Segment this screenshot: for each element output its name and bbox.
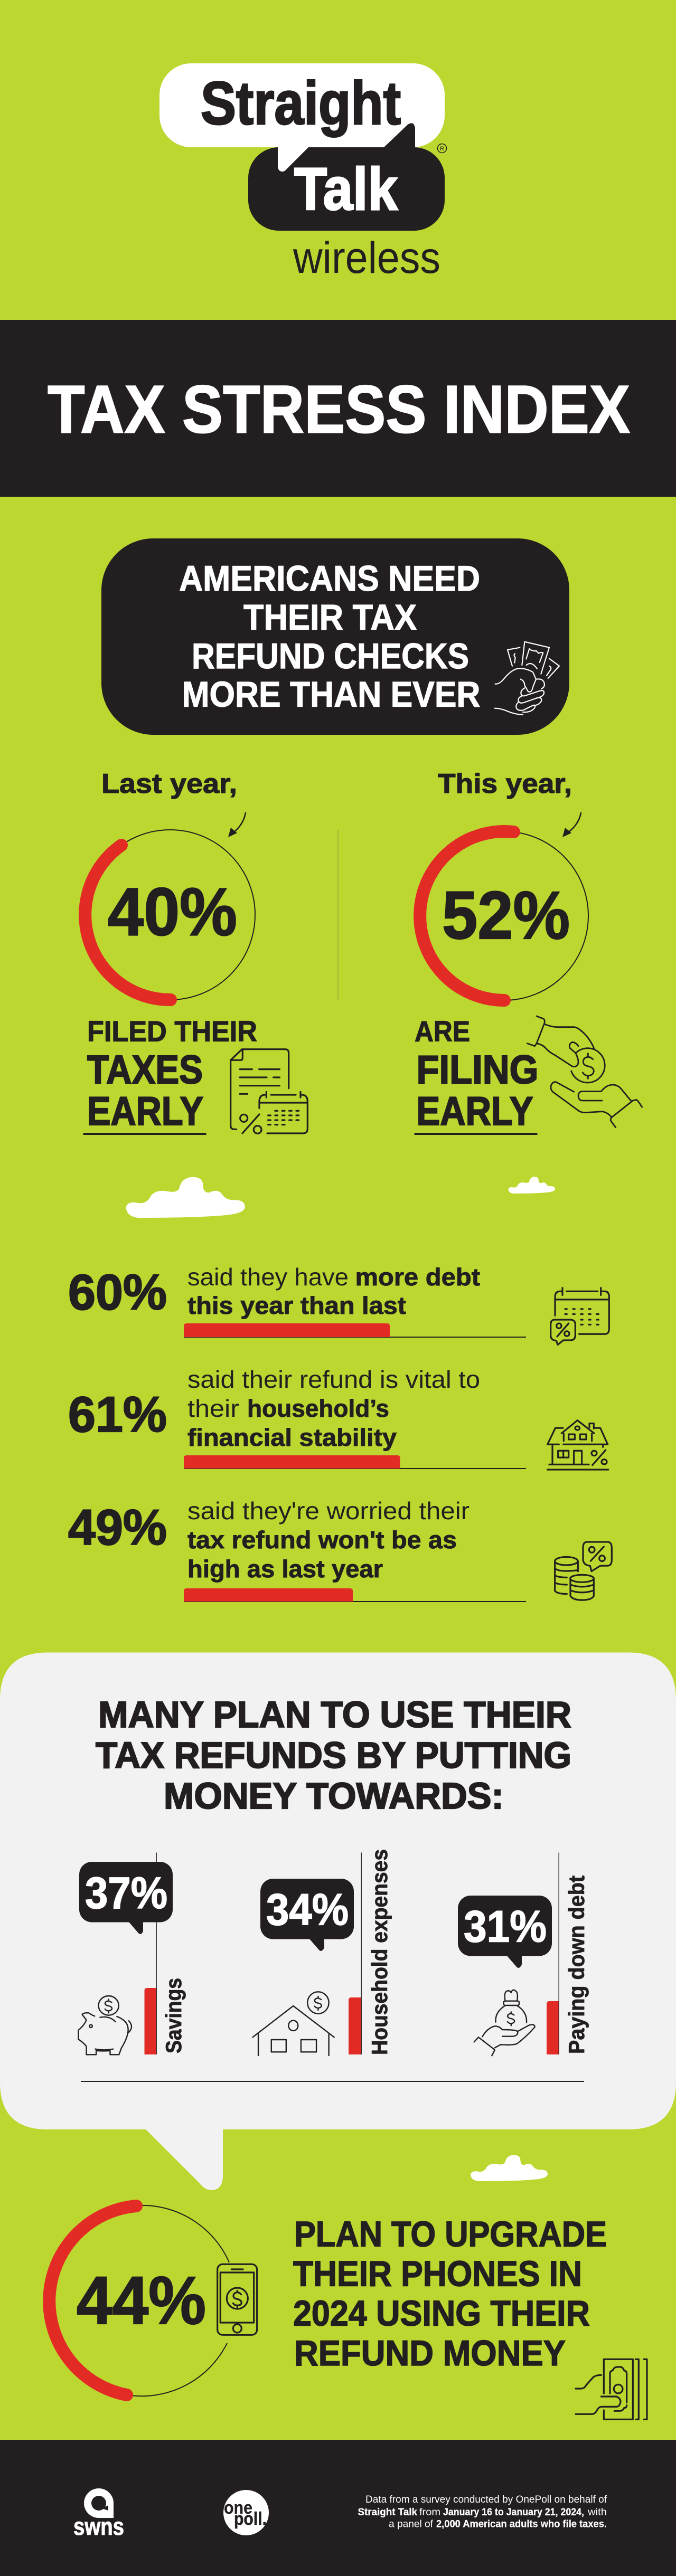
- icon: phone with dollar: [218, 2264, 257, 2335]
- logo: Straight Talk wireless: Straight: [201, 70, 401, 137]
- stat: 61% household stability: 61%: [68, 1387, 167, 1443]
- stat: 61% household stability: said their refund is vital to: [187, 1366, 480, 1393]
- stat: 49% worried about refund: [68, 1497, 612, 1602]
- text: survey source: Straight Talk: [358, 2507, 417, 2518]
- logo: Straight Talk wireless: Talk: [294, 156, 398, 222]
- icon: hands exchanging coin: [527, 1016, 642, 1128]
- donut chart: 40%: [85, 830, 255, 1000]
- logo: one poll: one: [224, 2498, 252, 2518]
- callout: 31%: [458, 1896, 552, 1968]
- callout: 31%: 31%: [464, 1901, 547, 1951]
- bar: paying down debt 31%: [458, 1853, 589, 2054]
- text: filed their taxes early: EARLY: [87, 1089, 203, 1134]
- text: filed their taxes early: [83, 1015, 257, 1135]
- heading: many plan to use: TAX REFUNDS BY PUTTING: [96, 1735, 571, 1776]
- text: plan to upgrade their phones: REFUND MONEY: [294, 2333, 566, 2373]
- bar: savings 37%: Savings: [161, 1978, 186, 2053]
- panel: Americans need their tax refund checks: [101, 538, 569, 735]
- panel: Americans need their tax refund checks: REFUND CHECKS: [192, 636, 469, 676]
- bar: savings 37%: [79, 1853, 186, 2054]
- divider: [338, 830, 339, 1000]
- callout: 37%: 37%: [85, 1868, 167, 1918]
- text: survey source: 2,000 American adults who file taxes.: [436, 2519, 607, 2530]
- bar: household expenses 34%: [260, 1849, 392, 2055]
- icon: house with coin: [252, 1992, 334, 2056]
- panel: Americans need their tax refund checks: MORE THAN EVER: [182, 675, 481, 715]
- bar: paying down debt 31%: Paying down debt: [564, 1876, 589, 2054]
- text: survey source: a panel of: [389, 2519, 434, 2530]
- icon: fist holding money: [495, 642, 559, 715]
- footer band: [0, 2440, 676, 2576]
- stat: 61% household stability: their: [187, 1395, 239, 1422]
- stat: 60% more debt: more debt: [355, 1263, 480, 1291]
- callout: 34%: 34%: [266, 1884, 349, 1934]
- text: filed their taxes early: FILED THEIR: [87, 1015, 257, 1047]
- logo: Straight Talk wireless: [159, 63, 447, 282]
- text: survey source: with: [587, 2507, 607, 2518]
- logo: Straight Talk wireless: wireless: [293, 233, 440, 282]
- stat: 60% more debt: this year than last: [187, 1292, 406, 1319]
- donut chart: 52%: 52%: [442, 878, 570, 953]
- stat: 61% household stability: financial stability: [187, 1424, 397, 1451]
- stat: 61% household stability: [68, 1366, 608, 1470]
- icon: money bag in hand: [474, 1990, 535, 2056]
- text: survey source: January 16 to January 21, 2024,: [443, 2507, 584, 2518]
- right column: this year: [414, 769, 642, 1135]
- donut chart: 44% with phone: 44%: [77, 2263, 206, 2338]
- icon: calendar with percent: [551, 1288, 609, 1345]
- logo: swns: swns: [73, 2513, 124, 2540]
- text: plan to upgrade their phones: 2024 USING THEIR: [293, 2293, 590, 2333]
- donut chart: 44% with phone: [49, 2205, 257, 2396]
- title band: [0, 320, 676, 497]
- icon: document and calendar: [231, 1049, 307, 1133]
- text: survey source: [358, 2494, 607, 2530]
- icon: coins with percent: [555, 1542, 612, 1600]
- heading: last year: Last year,: [101, 769, 237, 799]
- text: plan to upgrade their phones: [293, 2214, 607, 2373]
- donut chart: 40%: 40%: [108, 874, 237, 950]
- title band: TAX STRESS INDEX: [48, 372, 630, 448]
- cloud: large: [126, 1177, 245, 1218]
- icon: hand with cash: [576, 2359, 647, 2419]
- heading: this year: This year,: [438, 769, 572, 799]
- stat: 60% more debt: [68, 1263, 609, 1345]
- text: are filing early: FILING: [416, 1047, 539, 1093]
- text: survey source: from: [419, 2507, 440, 2518]
- text: plan to upgrade their phones: THEIR PHONES IN: [293, 2254, 582, 2294]
- panel: Americans need their tax refund checks: THEIR TAX: [243, 598, 417, 638]
- cloud: small: [509, 1177, 555, 1194]
- stat: 61% household stability: household’s: [247, 1395, 389, 1422]
- heading: many plan to use: [96, 1694, 571, 1816]
- stat: 60% more debt: said they have: [187, 1263, 349, 1291]
- icon: house with percent: [548, 1420, 608, 1470]
- bar: household expenses 34%: Household expenses: [367, 1849, 392, 2055]
- logo: Straight Talk wireless: R: [440, 146, 444, 152]
- heading: many plan to use: MANY PLAN TO USE THEIR: [98, 1694, 571, 1735]
- text: filed their taxes early: TAXES: [87, 1047, 203, 1093]
- text: are filing early: EARLY: [416, 1089, 533, 1134]
- cloud: lower right: [471, 2155, 548, 2181]
- stat: 60% more debt: 60%: [68, 1265, 167, 1321]
- donut chart: 52%: [419, 831, 588, 1000]
- stat: 49% worried about refund: high as last year: [187, 1555, 383, 1583]
- left column: last year: [83, 769, 307, 1135]
- text: survey source: Data from a survey conducted by OnePoll on behalf of: [365, 2494, 607, 2505]
- logo: one poll: [223, 2490, 269, 2535]
- callout: 37%: [79, 1862, 173, 1934]
- text: plan to upgrade their phones: PLAN TO UPGRADE: [294, 2214, 607, 2254]
- panel: Americans need their tax refund checks: AMERICANS NEED: [179, 558, 480, 599]
- stat: 49% worried about refund: said they're worried their: [187, 1497, 470, 1524]
- arrow: [562, 813, 581, 837]
- stat: 49% worried about refund: tax refund won't be as: [187, 1526, 457, 1554]
- text: are filing early: [414, 1015, 539, 1135]
- logo: one poll: poll.: [234, 2509, 267, 2529]
- logo: swns: [73, 2488, 124, 2540]
- panel: refund uses speech bubble: [0, 1652, 676, 2190]
- icon: piggy bank: [78, 1996, 132, 2054]
- callout: 34%: [260, 1879, 354, 1951]
- heading: many plan to use: MONEY TOWARDS:: [164, 1775, 504, 1816]
- text: are filing early: ARE: [415, 1015, 470, 1047]
- stat: 49% worried about refund: 49%: [68, 1500, 167, 1556]
- arrow: [228, 813, 246, 837]
